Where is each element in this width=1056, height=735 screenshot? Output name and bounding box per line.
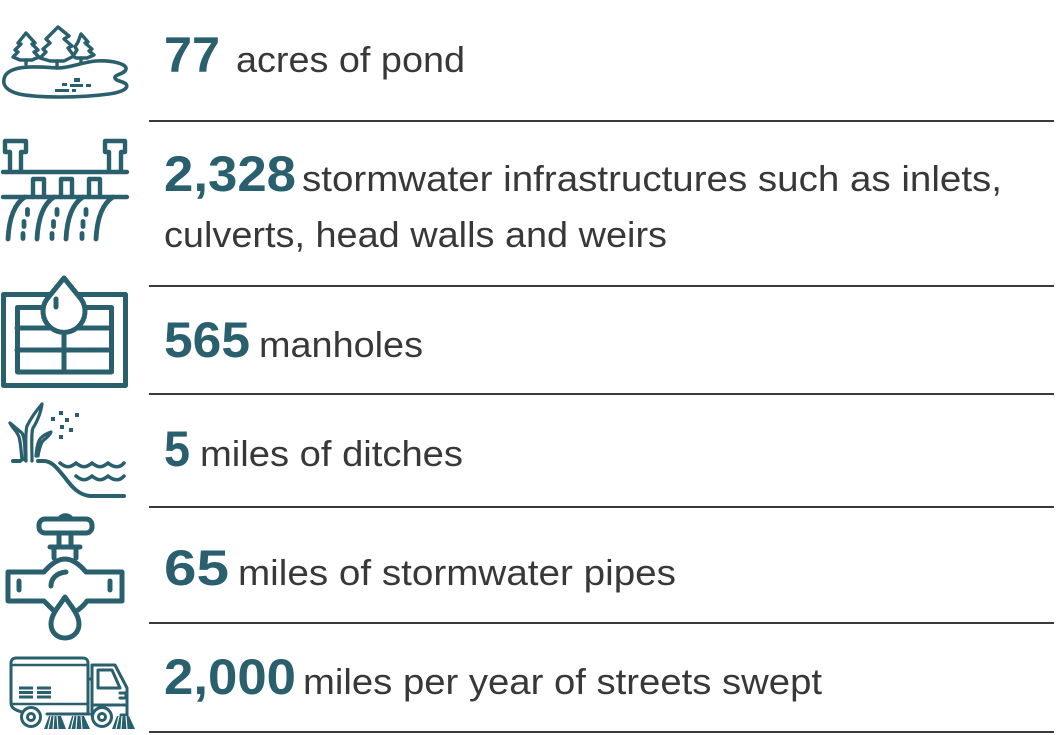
text: 2,328 stormwater infrastructures: stormwater infrastructures such as inlets,	[302, 158, 1002, 199]
text: 77 acres of pond	[164, 27, 465, 83]
text: 65 miles of stormwater pipes: 65	[164, 540, 229, 596]
text: 65 miles of stormwater pipes: miles of stormwater pipes	[238, 552, 676, 593]
text: 65 miles of stormwater pipes	[164, 540, 676, 596]
text: 77 acres of pond: 77	[164, 27, 220, 83]
text: 2,000 miles per year of streets swept: miles per year of streets swept	[303, 661, 822, 702]
text: 2,328 stormwater infrastructures	[164, 146, 1002, 255]
icon: street sweeper truck	[11, 658, 135, 729]
text: 5 miles of ditches: 5	[164, 421, 190, 477]
text: 565 manholes: manholes	[259, 324, 423, 365]
icon: stormwater infrastructure	[3, 141, 127, 239]
icon: ditch with grass and water	[10, 404, 124, 496]
text: 565 manholes	[164, 312, 423, 368]
text: 5 miles of ditches	[164, 421, 463, 477]
text: 2,328 stormwater infrastructures: culverts, head walls and weirs	[164, 214, 667, 255]
text: 2,000 miles per year of streets swept: 2,000	[164, 649, 296, 705]
text: 2,328 stormwater infrastructures: 2,328	[164, 146, 296, 202]
text: 5 miles of ditches: miles of ditches	[200, 433, 463, 474]
text: 77 acres of pond: acres of pond	[236, 39, 465, 80]
icon: manhole with water drop	[4, 278, 126, 386]
text: 565 manholes: 565	[164, 312, 250, 368]
icon: valve pipe with drop	[8, 513, 122, 638]
icon: pond with trees	[4, 27, 127, 97]
text: 2,000 miles per year of streets swept	[164, 649, 822, 705]
